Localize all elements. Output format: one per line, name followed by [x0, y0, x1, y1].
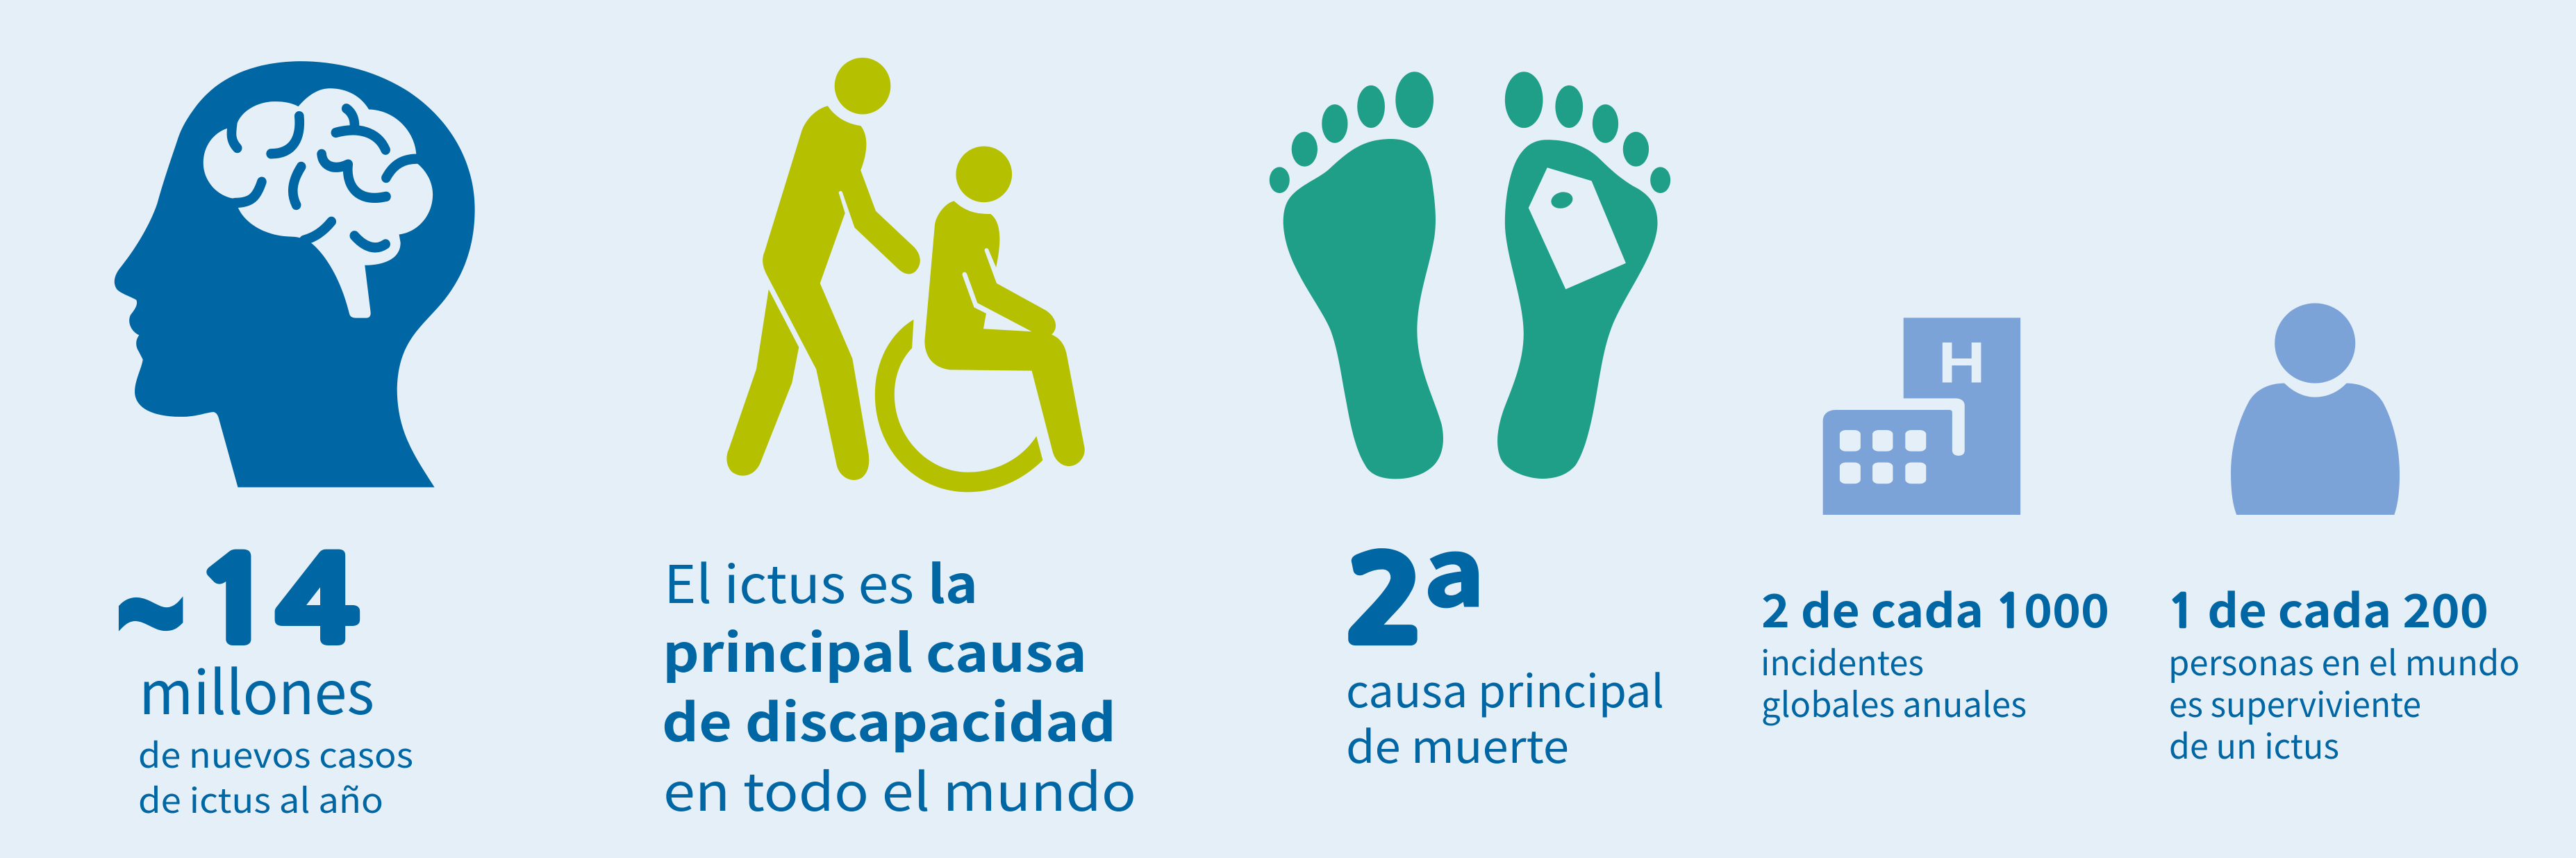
- text: 2 of 1000: globales anuales: [1761, 678, 2027, 727]
- text: new cases per year: [138, 729, 413, 823]
- text: 2 of 1000: incidentes: [1761, 636, 1924, 686]
- panel: disability: [662, 58, 1136, 826]
- panel: second cause of death: [1270, 72, 1670, 776]
- figure: 2a: a: [1424, 498, 1485, 633]
- text: main cause of death: de muerte: [1346, 712, 1569, 776]
- text: leading cause of disability: El ictus es: [664, 543, 914, 618]
- text: 1 of 200: personas en el mundo: [2168, 636, 2520, 686]
- text: millones: millones: [139, 645, 374, 732]
- figure: about 14: 14: [194, 544, 358, 658]
- text: leading cause of disability: la: [928, 543, 978, 618]
- text: main cause of death: [1346, 657, 1664, 776]
- icon: person: [2231, 303, 2400, 515]
- text: leading cause of disability: de discapacidad: [662, 681, 1116, 757]
- text: leading cause of disability: principal causa: [663, 611, 1087, 687]
- text: new cases per year: de ictus al año: [138, 774, 383, 823]
- icon: feet with toe tag: [1270, 72, 1670, 479]
- text: main cause of death: causa principal: [1346, 657, 1664, 720]
- text: 1 of 200: [2167, 575, 2520, 769]
- panel: survivors: [2167, 303, 2520, 769]
- figure: about 14: [116, 515, 358, 709]
- icon: carer pushing wheelchair: [726, 58, 1085, 492]
- figure: 2a: 2: [1346, 544, 1424, 658]
- text: 1 of 200: de un ictus: [2169, 720, 2339, 769]
- text: 1 of 200: es superviviente: [2169, 678, 2421, 727]
- figure: 2a: [1346, 498, 1485, 658]
- text: leading cause of disability: en todo el mundo: [663, 750, 1136, 826]
- panel: global incidents: [1761, 317, 2109, 727]
- icon: head with brain: [115, 61, 475, 487]
- icon: hospital: H: [1938, 330, 1986, 395]
- text: 2 of 1000: 2 de cada 1000: [1761, 575, 2109, 641]
- text: 2 of 1000: [1761, 575, 2109, 727]
- text: new cases per year: de nuevos casos: [138, 729, 413, 778]
- text: 1 of 200: 1 de cada 200: [2167, 575, 2488, 641]
- icon: hospital: [1823, 317, 2020, 515]
- panel: new stroke cases: [115, 61, 475, 823]
- text: leading cause of disability: [662, 543, 1136, 826]
- figure: about 14: ~: [116, 515, 185, 709]
